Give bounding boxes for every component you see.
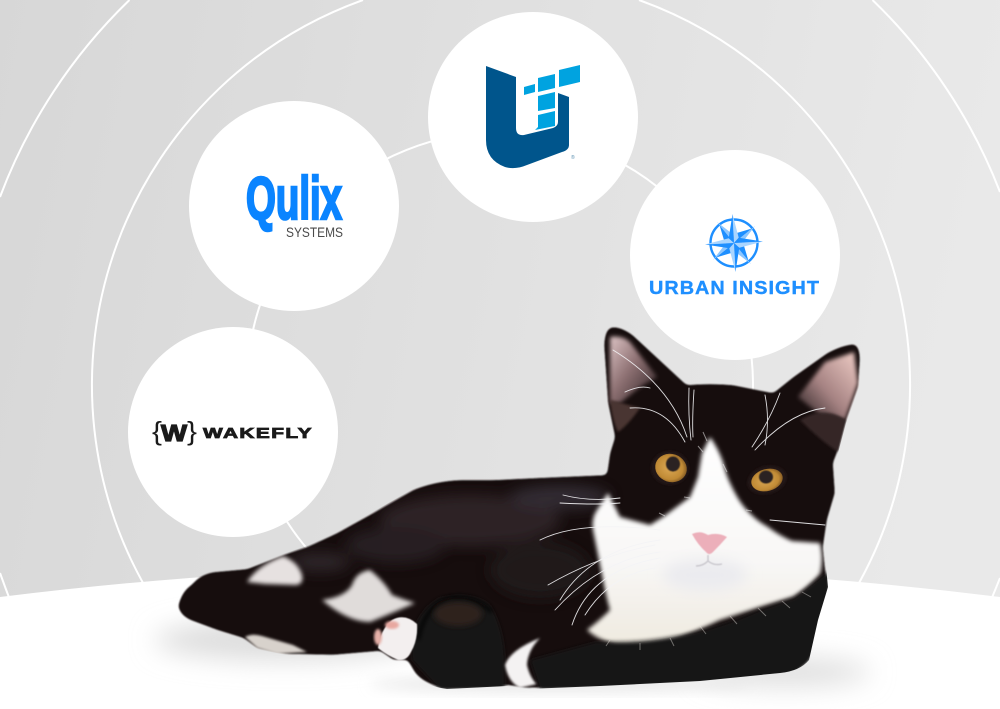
cat shadow [155,620,870,691]
logo: Wakefly wordmark: WAKEFLY [203,426,313,442]
chest fur fringe [606,592,811,650]
logo: T tiles [524,65,580,130]
foreleg shoulder [413,612,508,689]
right eye [748,466,786,494]
logo circle: U mark [428,12,638,222]
belly white patch [322,570,415,622]
whiskers [540,350,825,625]
cat fur shading and markings [245,337,858,690]
logo: Systems label: SYSTEMS [286,225,343,240]
back fur highlights [290,485,610,598]
floor dome [0,566,1000,709]
logo: Wakefly wordmark [152,416,313,446]
logo: Wakefly wordmark: W [161,420,187,446]
logo: U shape [486,66,569,168]
logo: Wakefly wordmark: } [187,416,197,446]
blaze fur fringe [659,432,752,516]
hind paw [378,617,417,660]
chin shadow [671,562,739,586]
chest and face white [587,437,822,645]
logo: Urban Insight wordmark: URBAN INSIGHT [649,277,820,298]
shoulder fur below chest [530,570,830,690]
logo: compass rose [704,213,764,273]
logo: Wakefly wordmark: { [152,416,162,446]
nose [692,532,727,554]
left ear interior [610,337,657,403]
tuxedo cat [177,326,861,690]
logo circle: Qulix Systems [189,101,399,311]
left eye [652,452,688,484]
logo circle: Wakefly [128,327,338,537]
cat silhouette [177,326,861,689]
hind toes [245,635,307,654]
logo: registered mark: ® [571,154,575,161]
logo: Qulix wordmark: Qulix [246,165,342,232]
front paw white [505,638,540,688]
hip white patch [247,556,302,585]
right ear interior [798,352,858,420]
mouth [696,555,722,566]
logo circle: Urban Insight [630,150,840,360]
